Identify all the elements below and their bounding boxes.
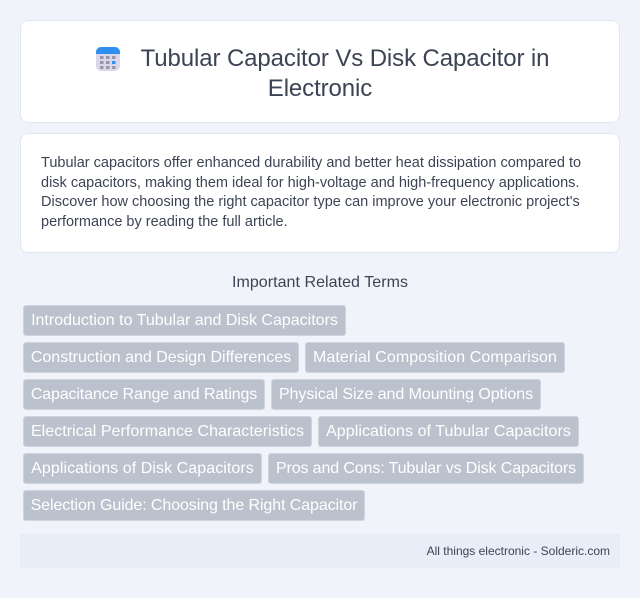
heading: related terms: Important Related Terms	[232, 274, 408, 291]
intro paragraph: disk capacitors, making them ideal for high-voltage and high-frequency applications.	[41, 174, 579, 190]
tag list	[23, 305, 584, 521]
tag: Physical Size and Mounting Options	[279, 386, 533, 403]
tag	[23, 342, 299, 373]
panel: intro text	[20, 133, 620, 253]
tag	[23, 416, 312, 447]
tag: Pros and Cons: Tubular vs Disk Capacitors	[276, 460, 576, 477]
tag	[23, 453, 262, 484]
icon: calendar	[96, 47, 120, 71]
intro paragraph	[41, 155, 581, 230]
footer text: All things electronic - Solderic.com	[427, 544, 610, 558]
tag: Construction and Design Differences	[31, 349, 291, 366]
title: Tubular Capacitor Vs Disk Capacitor in	[141, 45, 549, 72]
tag	[268, 453, 584, 484]
tag	[23, 379, 265, 410]
tag: Applications of Tubular Capacitors	[326, 423, 571, 440]
title: Electronic	[268, 75, 372, 102]
tag: Capacitance Range and Ratings	[31, 386, 257, 403]
tag	[305, 342, 565, 373]
tag: Selection Guide: Choosing the Right Capacitor	[31, 497, 357, 514]
tag: Electrical Performance Characteristics	[31, 423, 304, 440]
tag	[318, 416, 579, 447]
footer	[20, 534, 620, 568]
tag: Applications of Disk Capacitors	[31, 460, 254, 477]
intro paragraph: performance by reading the full article.	[41, 214, 288, 230]
tag: Introduction to Tubular and Disk Capacitors	[31, 312, 338, 329]
intro paragraph: Discover how choosing the right capacitor type can improve your electronic project's	[41, 194, 580, 210]
intro paragraph: Tubular capacitors offer enhanced durability and better heat dissipation compared to	[41, 155, 581, 171]
tag	[271, 379, 541, 410]
tag	[23, 490, 365, 521]
tag	[23, 305, 346, 336]
panel: title card	[20, 20, 620, 123]
title	[141, 45, 549, 102]
tag: Material Composition Comparison	[313, 349, 557, 366]
